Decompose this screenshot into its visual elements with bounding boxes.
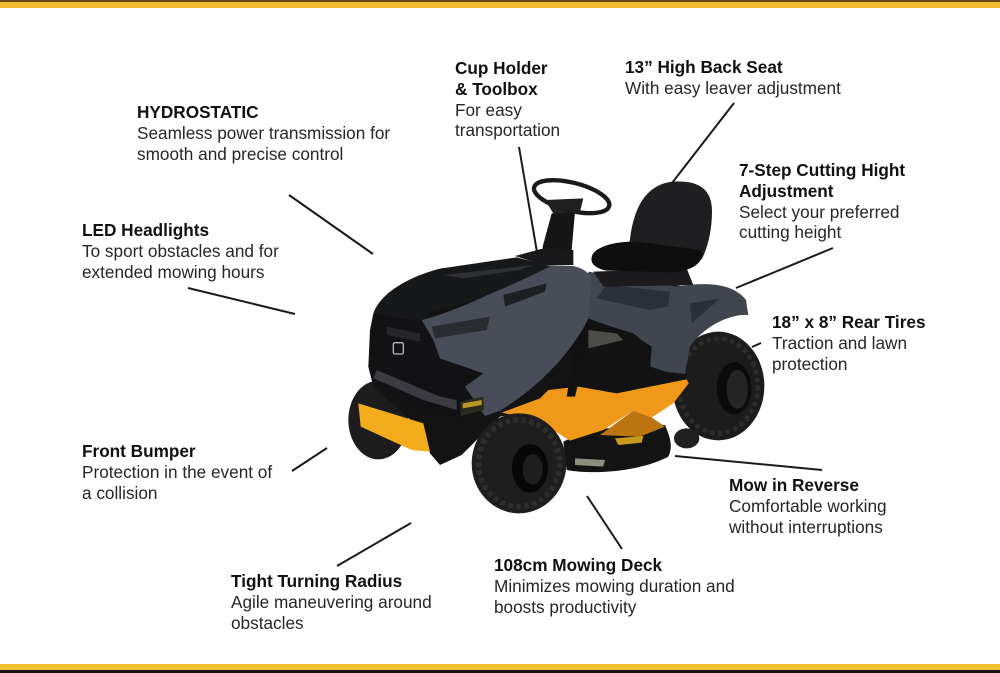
callout: cutting height: 7-Step Cutting Hight [739, 160, 905, 180]
callout: cutting height [739, 160, 905, 242]
callout: cup holder: For easy [455, 100, 522, 120]
floor and footrest [570, 318, 687, 392]
rear tire [672, 332, 764, 440]
callout: mowing deck: Minimizes mowing duration and [494, 576, 735, 596]
callout: front bumper: Protection in the event of [82, 462, 272, 482]
callout: LED headlights [82, 220, 279, 282]
callout: cup holder [455, 58, 560, 140]
callout: rear tires: protection [772, 354, 847, 374]
callout: cutting height: cutting height [739, 222, 841, 242]
callout: high back seat: With easy leaver adjustment [625, 78, 841, 98]
callout: turning radius: Tight Turning Radius [231, 571, 402, 591]
callout: mow in reverse: Mow in Reverse [729, 475, 859, 495]
callout: rear tires: 18” x 8” Rear Tires [772, 312, 926, 332]
mowing deck [502, 379, 699, 472]
callout: mow in reverse: Comfortable working [729, 496, 887, 516]
callout: cup holder: Cup Holder [455, 58, 548, 78]
callout: turning radius: obstacles [231, 613, 304, 633]
callout: high back seat: 13” High Back Seat [625, 57, 783, 77]
callout: front bumper [82, 441, 272, 503]
callout: hydrostatic [137, 102, 390, 164]
callout: high back seat [625, 57, 841, 98]
callout: LED headlights: extended mowing hours [82, 262, 264, 282]
callout: mow in reverse [729, 475, 887, 537]
callout: mowing deck [494, 555, 735, 617]
callout: turning radius: Agile maneuvering around [231, 592, 432, 612]
callout: mowing deck: 108cm Mowing Deck [494, 555, 662, 575]
hood and engine cover [368, 257, 592, 418]
callout: LED headlights: LED Headlights [82, 220, 209, 240]
callout: cutting height: Adjustment [739, 181, 834, 201]
steering wheel and column [515, 174, 613, 265]
seat [591, 181, 712, 287]
callout: hydrostatic: HYDROSTATIC [137, 102, 259, 122]
callout: front bumper: Front Bumper [82, 441, 196, 461]
callout: LED headlights: To sport obstacles and for [82, 241, 279, 261]
callout: rear tires [772, 312, 926, 374]
callout: front bumper: a collision [82, 483, 157, 503]
top yellow border [0, 0, 1000, 8]
callout: cutting height: Select your preferred [739, 202, 900, 222]
front tire [472, 413, 566, 513]
callout: cup holder: transportation [455, 120, 560, 140]
callout: turning radius [231, 571, 432, 633]
callout: rear tires: Traction and lawn [772, 333, 907, 353]
callout: mowing deck: boosts productivity [494, 597, 636, 617]
chassis silhouette [368, 265, 687, 465]
callout: cup holder: & Toolbox [455, 79, 538, 99]
callout: mow in reverse: without interruptions [729, 517, 883, 537]
callout: hydrostatic: Seamless power transmission for [137, 123, 390, 143]
rear fender and body [588, 272, 748, 374]
yellow front bumper [358, 403, 430, 452]
front left tire [348, 381, 408, 459]
bottom yellow border [0, 664, 1000, 673]
callout: hydrostatic: smooth and precise control [137, 144, 343, 164]
